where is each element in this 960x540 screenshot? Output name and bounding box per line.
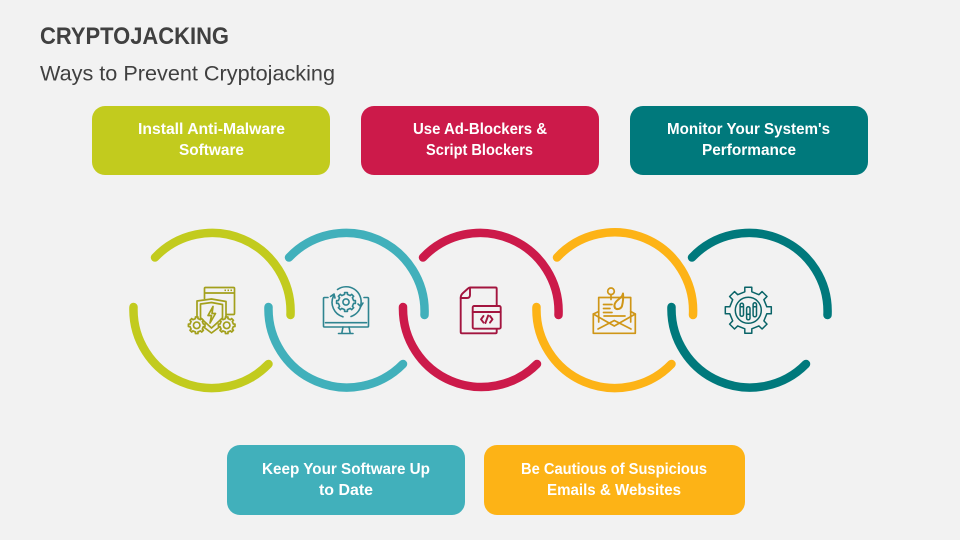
- card: Be Cautious of Suspicious Emails & Websites: Emails & Websites: [547, 482, 681, 499]
- icon: shield with gears and browser window: [188, 288, 235, 334]
- card: Use Ad-Blockers & Script Blockers: Use Ad-Blockers &: [413, 121, 547, 138]
- card: Be Cautious of Suspicious Emails & Websites: Be Cautious of Suspicious: [521, 461, 707, 478]
- title: CRYPTOJACKING: [40, 23, 229, 50]
- card: Keep Your Software Up to Date: [227, 445, 465, 515]
- ring: light teal: [268, 233, 425, 388]
- icon: monitor with rotating gear: [324, 287, 368, 334]
- card: Install Anti-Malware Software: Install Anti-Malware: [138, 121, 285, 138]
- ring: amber: [536, 232, 693, 388]
- card: Keep Your Software Up to Date: Keep Your Software Up: [262, 461, 430, 478]
- icon: phishing email envelope: [593, 288, 635, 333]
- ring: dark teal: [671, 233, 828, 388]
- card: Monitor Your System's Performance: Monitor Your System's: [667, 121, 830, 138]
- card: Install Anti-Malware Software: [92, 106, 330, 175]
- card: Be Cautious of Suspicious Emails & Websites: [484, 445, 745, 515]
- card: Monitor Your System's Performance: Performance: [702, 142, 796, 159]
- icon: code file: [461, 288, 501, 333]
- ring: crimson: [403, 233, 559, 387]
- icon: gear with sliders: [725, 287, 771, 333]
- ring: lime: [133, 233, 291, 388]
- card: Use Ad-Blockers & Script Blockers: Script Blockers: [426, 142, 533, 159]
- card: Install Anti-Malware Software: Software: [179, 142, 244, 159]
- card: Monitor Your System's Performance: [630, 106, 868, 175]
- subtitle: Ways to Prevent Cryptojacking: [40, 62, 335, 86]
- card: Keep Your Software Up to Date: to Date: [319, 482, 373, 499]
- card: Use Ad-Blockers & Script Blockers: [361, 106, 599, 175]
